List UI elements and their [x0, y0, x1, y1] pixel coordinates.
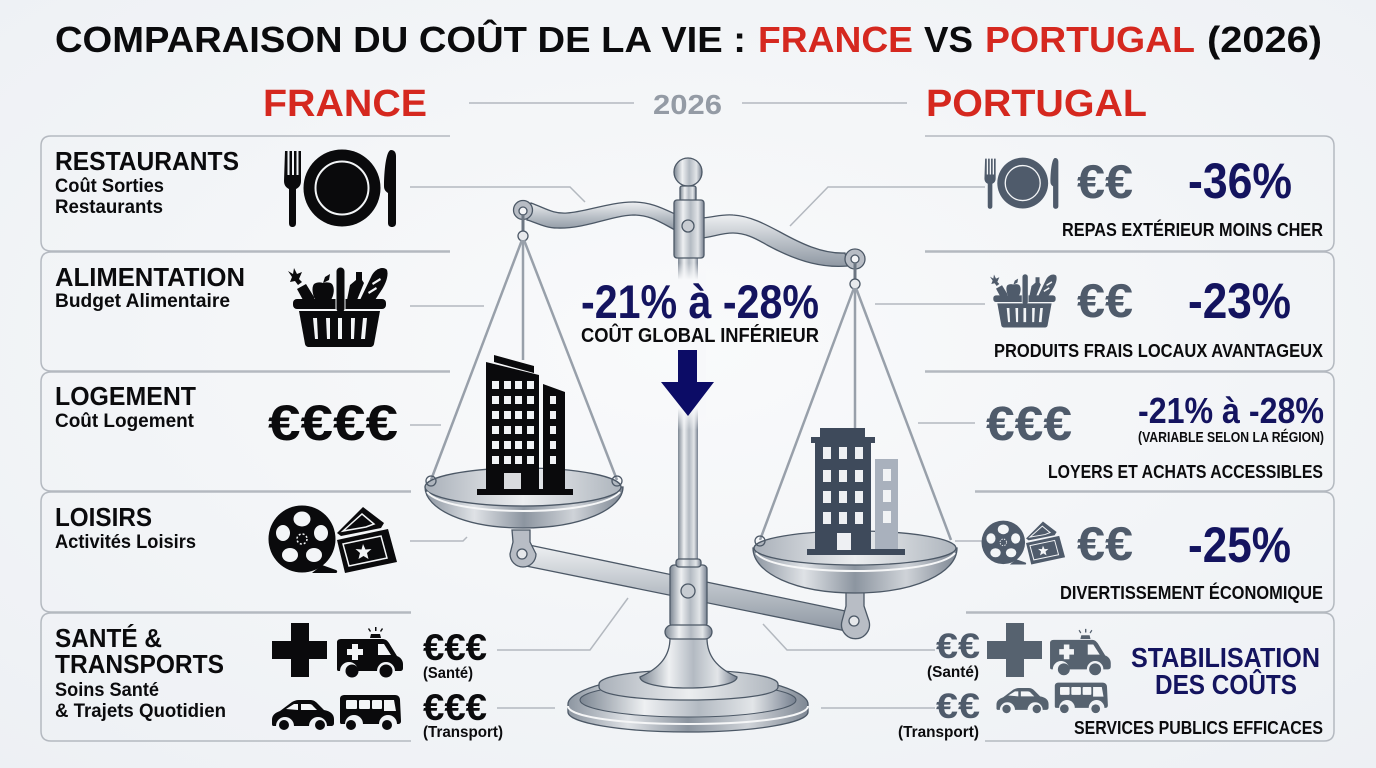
icon: basket: [288, 267, 388, 347]
scale: lower beam: [510, 530, 870, 639]
panel: restaurants Portugal: €€: [1077, 155, 1133, 208]
leader lines: [410, 187, 628, 708]
icon: plate: [284, 150, 396, 227]
panel: santé et transports Portugal: (Santé): [927, 664, 979, 681]
panel: loisirs Portugal: €€: [1077, 517, 1133, 570]
central callout: COÛT GLOBAL INFÉRIEUR: [581, 323, 819, 347]
icon: basket: [990, 274, 1057, 327]
panel: alimentation France: [55, 262, 388, 347]
year label: 2026: [653, 89, 722, 120]
panel: alimentation France: ALIMENTATION: [55, 262, 245, 292]
panel: logement Portugal: [986, 390, 1324, 482]
panel: santé et transports Portugal: €€: [936, 627, 980, 666]
heading: Portugal: PORTUGAL: [926, 83, 1147, 125]
panel: santé et transports Portugal: (Transport): [898, 724, 979, 741]
scale: knob and pivot: [674, 158, 704, 258]
panel: loisirs France: [55, 502, 397, 573]
scale: pillar: [665, 250, 712, 639]
panel: logement Portugal: (VARIABLE SELON LA RÉGION): [1138, 429, 1324, 446]
panel: santé et transports France: (Transport): [423, 724, 503, 741]
panel: loisirs France: Activités Loisirs: [55, 531, 196, 553]
panel: alimentation France: Budget Alimentaire: [55, 290, 230, 312]
panel: santé et transports Portugal: SERVICES PUBLICS EFFICACES: [1074, 717, 1323, 738]
panel: loisirs Portugal: DIVERTISSEMENT ÉCONOMIQUE: [1060, 582, 1323, 603]
panel: alimentation Portugal: [990, 273, 1324, 361]
panel: logement Portugal: -21% à -28%: [1138, 390, 1324, 431]
panel: loisirs France: LOISIRS: [55, 502, 152, 532]
icons: health and transport: [272, 623, 403, 730]
panel: logement Portugal: LOYERS ET ACHATS ACCESSIBLES: [1048, 461, 1323, 482]
title: (2026): [1207, 19, 1322, 60]
building: France: [477, 355, 573, 495]
panel: restaurants Portugal: [984, 153, 1323, 240]
panel: santé et transports Portugal: STABILISATION: [1131, 642, 1320, 673]
building: Portugal: [807, 428, 905, 555]
panel: santé et transports Portugal: €€: [936, 687, 980, 726]
panel: loisirs Portugal: [982, 517, 1323, 603]
icon: film and tickets: [982, 521, 1065, 564]
panel: restaurants France: Restaurants: [55, 196, 163, 218]
panel: restaurants France: RESTAURANTS: [55, 146, 239, 176]
panel: santé et transports France: Soins Santé: [55, 679, 159, 701]
panel: alimentation Portugal: €€: [1077, 274, 1133, 327]
panel: alimentation Portugal: -23%: [1188, 273, 1291, 329]
panel: logement France: LOGEMENT: [55, 381, 196, 411]
scale: left chains and pan: [425, 200, 623, 528]
heading: France: FRANCE: [263, 83, 427, 125]
panel: santé et transports France: [55, 623, 503, 741]
panel: santé et transports France: (Santé): [423, 665, 473, 682]
panel: santé et transports France: TRANSPORTS: [55, 649, 224, 679]
central callout: -21% à -28%: [581, 275, 819, 328]
scale: right chains and pan: [753, 249, 957, 593]
panel: logement France: Coût Logement: [55, 410, 194, 432]
panel: restaurants France: [55, 146, 396, 227]
panel: santé et transports France: €€€: [423, 627, 487, 668]
panel: restaurants Portugal: -36%: [1188, 153, 1292, 209]
icon: film and tickets: [268, 506, 397, 573]
panel: loisirs Portugal: -25%: [1188, 517, 1291, 573]
scale: top beam: [527, 202, 848, 266]
panel: logement Portugal: €€€: [986, 398, 1072, 451]
arrow: down: [661, 350, 714, 416]
panel: santé et transports France: & Trajets Quotidien: [55, 700, 226, 722]
panel: restaurants France: Coût Sorties: [55, 175, 164, 197]
panel: logement France: [55, 381, 398, 451]
panel: santé et transports Portugal: DES COÛTS: [1155, 668, 1297, 700]
title: COMPARAISON DU COÛT DE LA VIE :: [55, 18, 746, 60]
icons: health and transport: [987, 623, 1111, 713]
scale: base: [568, 638, 808, 732]
panel: santé et transports France: €€€: [423, 687, 487, 728]
panel: alimentation Portugal: PRODUITS FRAIS LOCAUX AVANTAGEUX: [994, 340, 1324, 361]
panel: santé et transports Portugal: [898, 623, 1323, 741]
panel outlines: [41, 136, 450, 741]
title: PORTUGAL: [985, 19, 1195, 60]
scale: [425, 158, 957, 732]
title: FRANCE: [758, 19, 913, 60]
icon: plate: [984, 158, 1058, 209]
panel: santé et transports France: SANTÉ &: [55, 623, 162, 653]
title: VS: [924, 19, 973, 60]
central callout: [581, 275, 819, 416]
title: [55, 18, 1322, 60]
panel: logement France: €€€€: [268, 395, 398, 451]
panel: restaurants Portugal: REPAS EXTÉRIEUR MOINS CHER: [1062, 219, 1323, 240]
